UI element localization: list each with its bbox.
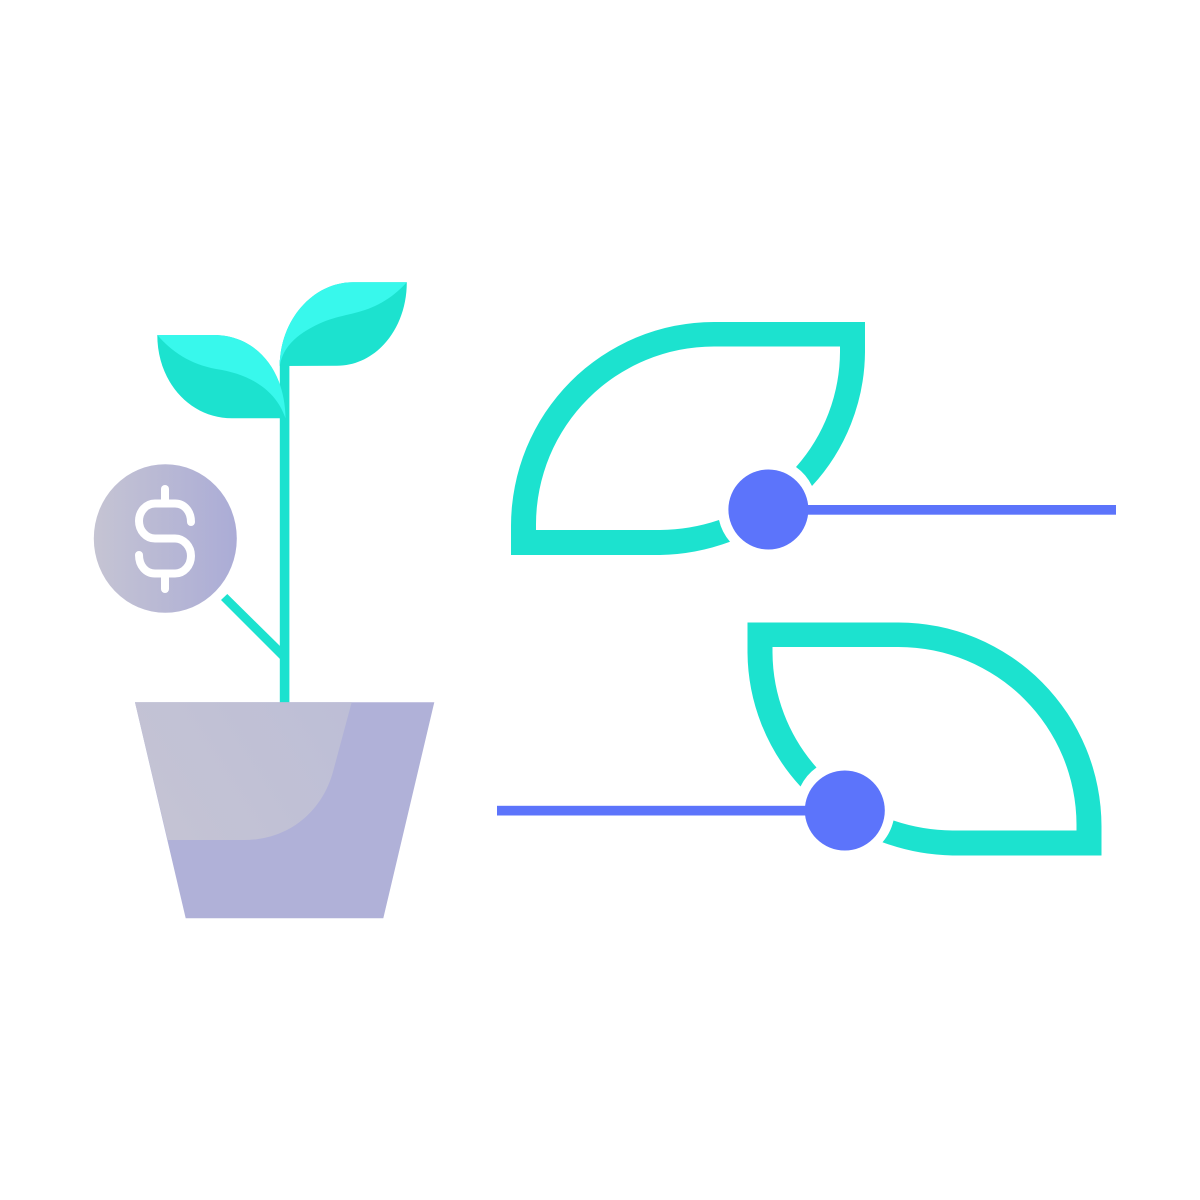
dollar coin icon	[94, 464, 237, 613]
upper leaf outline	[511, 322, 865, 555]
plant stem	[280, 360, 289, 705]
upper connector line	[800, 505, 1116, 515]
plant branch	[221, 594, 281, 660]
upper node	[728, 470, 808, 550]
lower leaf outline	[748, 622, 1102, 856]
flower pot	[135, 702, 434, 918]
right leaf	[280, 282, 407, 366]
lower connector line	[497, 806, 813, 816]
lower node	[805, 770, 885, 850]
left leaf	[157, 335, 286, 418]
